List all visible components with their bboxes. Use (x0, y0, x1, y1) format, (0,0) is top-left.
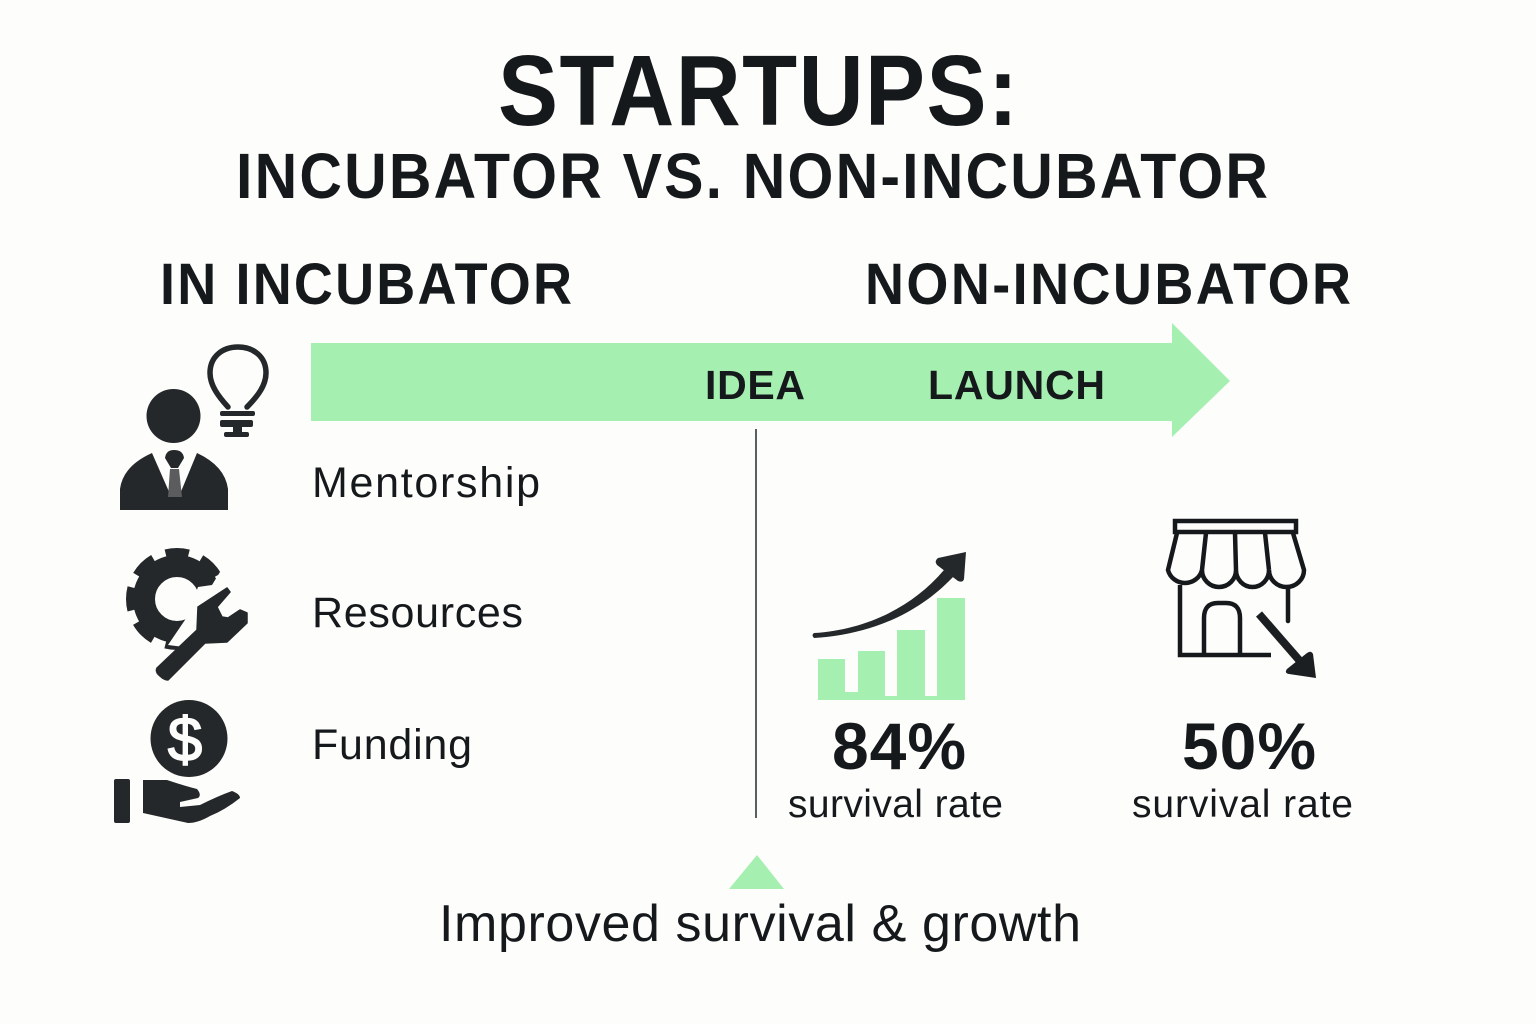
label: mentorship: Mentorship (312, 459, 540, 507)
divider line (755, 429, 757, 818)
icon: gear and wrench (131, 553, 248, 680)
heading: in incubator: IN INCUBATOR (160, 251, 572, 317)
icon: hand holding dollar coin: $ (168, 706, 202, 775)
icon: rising bar chart (812, 552, 966, 700)
timeline label: launch: LAUNCH (928, 362, 1105, 408)
title: STARTUPS: (498, 36, 1018, 147)
icon: hand holding dollar coin (114, 700, 240, 823)
icon: mentor with light bulb (120, 347, 266, 510)
stat label: survival rate non-incubator: survival rate (1132, 783, 1353, 826)
triangle marker (729, 855, 784, 889)
heading: non-incubator: NON-INCUBATOR (865, 251, 1351, 317)
subtitle: INCUBATOR VS. NON-INCUBATOR (236, 141, 1268, 213)
caption: Improved survival & growth (439, 895, 1081, 953)
stat: 50%: 50% (1182, 709, 1316, 783)
stat label: survival rate incubator: survival rate (788, 783, 1003, 826)
label: resources: Resources (312, 589, 523, 637)
label: funding: Funding (312, 721, 472, 769)
icon: storefront with falling arrow (1168, 521, 1316, 678)
stat: 84%: 84% (832, 709, 966, 783)
timeline label: idea: IDEA (705, 362, 805, 408)
timeline arrow (311, 323, 1230, 437)
